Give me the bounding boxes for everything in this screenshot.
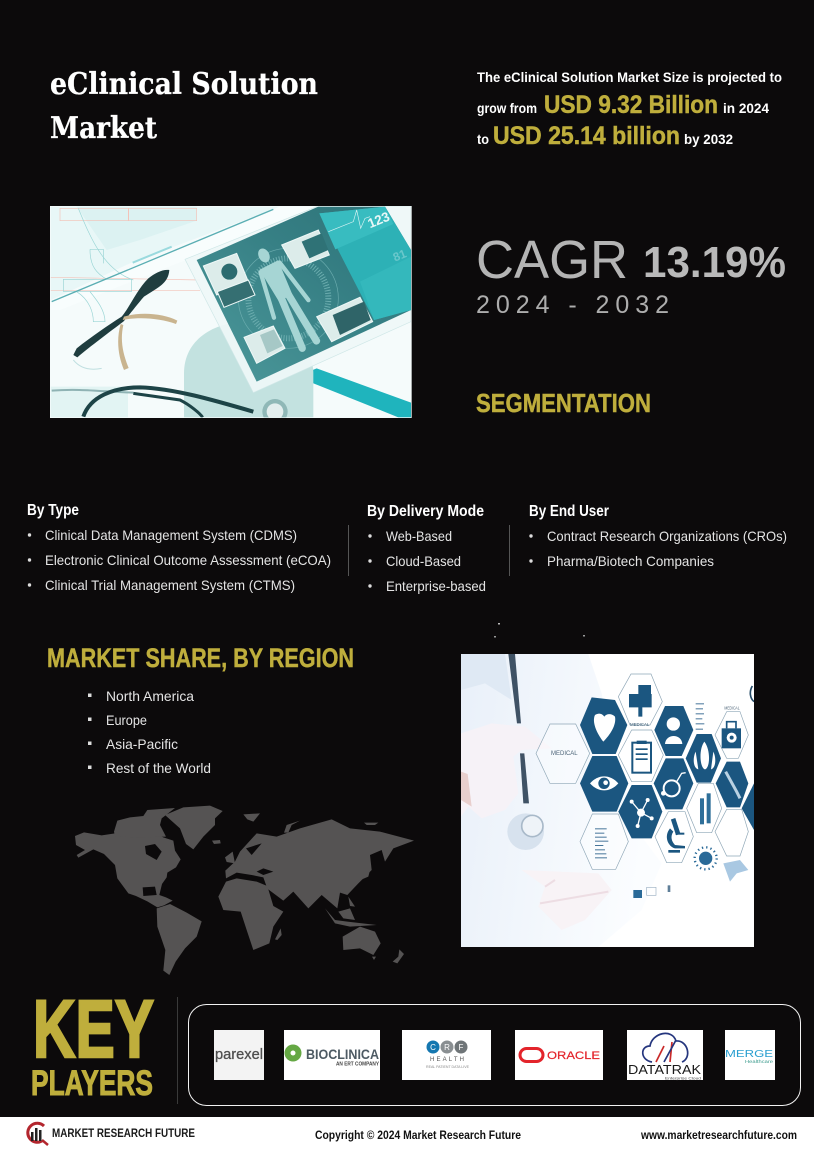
segment: by delivery mode: By Delivery Mode <box>367 503 484 520</box>
gloved hand <box>461 724 508 818</box>
region list: Europe <box>106 712 147 728</box>
gauge rings <box>248 258 328 338</box>
segment: by delivery mode <box>367 503 486 594</box>
logo: datatrak <box>627 1030 703 1080</box>
image: doctor touching medical hexagon interface: MEDICAL <box>630 722 650 728</box>
segment: by end user <box>529 503 787 569</box>
glasses <box>73 270 169 357</box>
segment: by delivery mode: Web-Based <box>386 528 452 544</box>
logo: bioclinica: BIOCLINICA <box>306 1046 379 1062</box>
heading: key players: KEY <box>33 984 154 1075</box>
market size statement: The eClinical Solution Market Size is projected to <box>477 69 782 85</box>
image: tablet with medical display, glasses and stethoscope: 81 <box>391 246 409 264</box>
CAGR: CAGR <box>476 230 628 290</box>
market size statement <box>477 69 782 150</box>
world map <box>75 806 414 975</box>
market size statement: USD 25.14 billion <box>493 122 680 150</box>
logo: parexel: parexel <box>215 1046 263 1063</box>
hexagon solids <box>580 697 754 838</box>
logo: merge healthcare: Healthcare <box>745 1059 774 1064</box>
human body <box>258 248 320 352</box>
hexagon outlines <box>536 674 748 869</box>
logo: datatrak: DATATRAK <box>628 1062 701 1077</box>
heading: key players <box>31 984 154 1103</box>
logo: oracle: ORACLE <box>547 1050 600 1062</box>
logo: bioclinica <box>284 1030 380 1080</box>
image: tablet with medical display, glasses and stethoscope: 123 <box>366 209 392 231</box>
segment: by delivery mode: Enterprise-based <box>386 578 486 594</box>
image: doctor touching medical hexagon interface: MEDICAL <box>724 705 740 710</box>
segment: by end user: Contract Research Organizations (CROs) <box>547 528 787 544</box>
segment: by end user: By End User <box>529 503 609 520</box>
market size statement: in 2024 <box>723 100 769 116</box>
title: eClinical Solution <box>50 67 318 102</box>
stethoscope <box>52 390 133 393</box>
image: doctor touching medical hexagon interface <box>461 654 754 947</box>
region list: North America <box>106 688 194 704</box>
market size statement: to <box>477 131 489 147</box>
footer: Copyright © 2024 Market Research Future <box>315 1128 521 1142</box>
market size statement: USD 9.32 Billion <box>544 91 718 119</box>
image: doctor touching medical hexagon interface: MEDICAL <box>551 750 578 757</box>
region list <box>88 688 211 776</box>
title <box>50 67 318 146</box>
segment: by delivery mode: Cloud-Based <box>386 553 461 569</box>
logo: merge healthcare: MERGE <box>725 1049 773 1060</box>
logo: datatrak: Enterprise Cloud <box>665 1076 701 1080</box>
segment: by type: By Type <box>27 502 79 519</box>
logo: CRF Health: HEALTH <box>430 1057 464 1063</box>
segment: by type <box>27 502 331 593</box>
CAGR <box>476 230 786 319</box>
CAGR: 2024 - 2032 <box>476 291 669 319</box>
segment: by type: Clinical Data Management System (CDMS) <box>45 527 297 543</box>
hexagon icons <box>594 714 615 742</box>
heading: market share by region: MARKET SHARE, BY REGION <box>47 643 354 673</box>
pale semicircle <box>184 322 313 417</box>
teal strip <box>313 368 411 418</box>
segment: by type: Electronic Clinical Outcome Assessment (eCOA) <box>45 552 331 568</box>
footer: MARKET RESEARCH FUTURE <box>52 1126 195 1140</box>
heading: key players: PLAYERS <box>31 1064 153 1103</box>
screen panels <box>203 230 373 363</box>
logo: merge healthcare <box>725 1030 775 1080</box>
logo: CRF Health: C <box>430 1043 436 1052</box>
logo: parexel <box>214 1030 264 1080</box>
market size statement: grow from <box>477 100 537 116</box>
logo: bioclinica: AN ERT COMPANY <box>336 1062 380 1068</box>
logo: CRF Health: REAL PATIENT DATA LIVE <box>426 1064 469 1069</box>
key players panel <box>188 1004 800 1106</box>
doctor coat <box>461 654 608 947</box>
tablet <box>185 207 411 393</box>
region list: Asia-Pacific <box>106 736 178 752</box>
logo: CRF Health: F <box>459 1043 464 1052</box>
logo: CRF Health <box>402 1030 491 1080</box>
segment: by type: Clinical Trial Management System (CTMS) <box>45 577 295 593</box>
footer <box>0 1117 814 1150</box>
market size statement: by 2032 <box>684 131 733 147</box>
region list: Rest of the World <box>106 760 211 776</box>
logo: oracle <box>515 1030 603 1080</box>
icon: market research future logo <box>28 1123 48 1145</box>
title: Market <box>50 111 157 146</box>
segment: by end user: Pharma/Biotech Companies <box>547 553 714 569</box>
decorative blueprint lines <box>51 208 200 291</box>
logo: CRF Health: R <box>444 1043 450 1052</box>
image: tablet with medical display, glasses and stethoscope <box>50 206 412 424</box>
CAGR: 13.19% <box>643 238 786 287</box>
heading: segmentation: SEGMENTATION <box>476 388 651 418</box>
